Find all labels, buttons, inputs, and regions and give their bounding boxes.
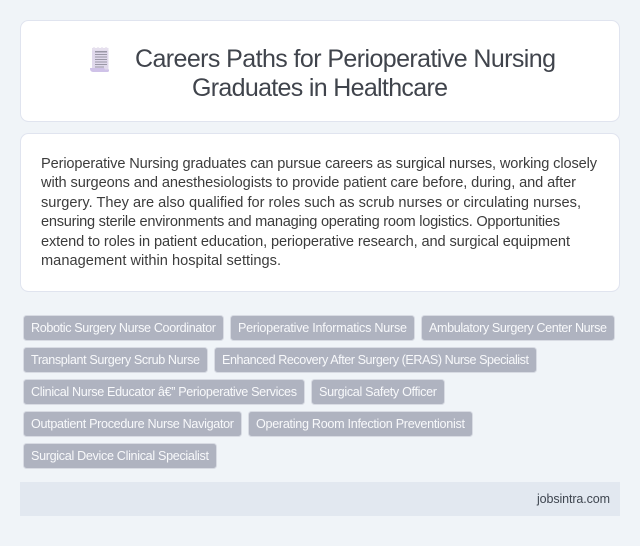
tag: Robotic Surgery Nurse Coordinator <box>31 321 216 335</box>
text block: summary paragraph <box>40 156 598 269</box>
tag <box>24 380 304 404</box>
heading <box>135 45 556 102</box>
heading: Graduates in Healthcare <box>192 74 448 102</box>
tag: Ambulatory Surgery Center Nurse <box>429 321 607 335</box>
tag: Surgical Safety Officer <box>319 385 437 399</box>
tag <box>230 316 414 340</box>
tag <box>24 412 242 436</box>
tag: Enhanced Recovery After Surgery (ERAS) Nurse Specialist <box>222 353 530 367</box>
footer <box>20 482 620 516</box>
tag <box>24 316 224 340</box>
text block: summary paragraph: extend to roles in patient education, perioperative research, and surgical equipment <box>41 234 570 250</box>
panel: career tags <box>24 316 614 468</box>
icon: document scroll <box>90 47 109 72</box>
tag <box>248 412 472 436</box>
tag: Clinical Nurse Educator â€” Perioperative Services <box>31 385 297 399</box>
text block: summary paragraph: surgery. They are also qualified for roles such as scrub nurses or circulating nurses, <box>41 195 581 211</box>
tag: Outpatient Procedure Nurse Navigator <box>31 417 234 431</box>
text block: summary paragraph: Perioperative Nursing graduates can pursue careers as surgical nurses, working closely <box>41 156 598 172</box>
text block: summary paragraph: with surgeons and anesthesiologists to provide patient care before, during, and after <box>40 175 576 191</box>
panel: title header <box>20 20 620 122</box>
tag <box>24 444 216 468</box>
heading: Careers Paths for Perioperative Nursing <box>135 45 556 73</box>
tag: Transplant Surgery Scrub Nurse <box>31 353 200 367</box>
tag: Perioperative Informatics Nurse <box>238 321 407 335</box>
tag: Surgical Device Clinical Specialist <box>31 449 210 463</box>
tag <box>24 348 208 372</box>
tag <box>422 316 614 340</box>
footer source text: jobsintra.com <box>536 492 610 506</box>
tag <box>312 380 444 404</box>
tag: Operating Room Infection Preventionist <box>256 417 466 431</box>
text block: summary paragraph: management within hospital settings. <box>41 253 281 269</box>
panel: description <box>20 134 620 292</box>
tag <box>214 348 536 372</box>
text block: summary paragraph: ensuring sterile environments and managing operating room logistics. Opportunities <box>41 214 560 230</box>
